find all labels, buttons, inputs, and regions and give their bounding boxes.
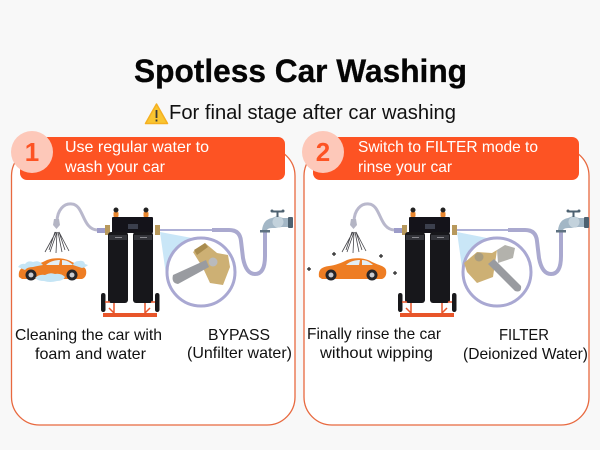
step 1 caption: car: foam and water	[35, 346, 147, 363]
step 2 filter system diagram	[307, 204, 589, 317]
icon: warning triangle	[146, 104, 168, 124]
subtitle: For final stage after car washing	[169, 102, 456, 124]
step 1 instruction	[64, 139, 209, 176]
step 1 caption: valve mode: BYPASS	[208, 327, 270, 344]
step 2 caption: valve mode: FILTER	[499, 327, 549, 344]
step 2 caption: valve mode	[463, 327, 588, 363]
step 1 instruction: wash your car	[64, 159, 166, 176]
panel: step 1	[11, 131, 295, 425]
step 2 caption: car	[307, 326, 442, 362]
step 1 caption: valve mode: (Unfilter water)	[187, 345, 292, 362]
step 1 caption: valve mode	[187, 327, 292, 362]
step 2 number badge: 2	[316, 137, 330, 167]
panel: step 2	[302, 131, 589, 425]
step 1 number badge: 1	[25, 137, 39, 167]
step 1 instruction: Use regular water to	[65, 139, 209, 156]
step 2 instruction	[358, 139, 538, 176]
step 2 number badge	[302, 131, 344, 173]
step 2 caption: valve mode: (Deionized Water)	[463, 346, 588, 363]
title: Spotless Car Washing	[134, 53, 467, 89]
step 2 banner	[313, 137, 579, 180]
icon: clean car with sparkles	[307, 252, 397, 280]
step 1 number badge	[11, 131, 53, 173]
step 1 caption: car: Cleaning the car with	[15, 327, 162, 344]
step 1 filter system diagram	[18, 204, 293, 317]
icon: filter valve	[463, 238, 531, 306]
step 1 caption: car	[15, 327, 162, 363]
icon: car covered in foam	[18, 258, 88, 282]
step 2 instruction: Switch to FILTER mode to	[358, 139, 538, 156]
step 1 banner	[20, 137, 285, 180]
step 2 caption: car: without wipping	[319, 345, 433, 362]
step 2 instruction: rinse your car	[358, 159, 453, 176]
icon: bypass valve	[167, 238, 235, 306]
step 2 caption: car: Finally rinse the car	[307, 326, 442, 343]
